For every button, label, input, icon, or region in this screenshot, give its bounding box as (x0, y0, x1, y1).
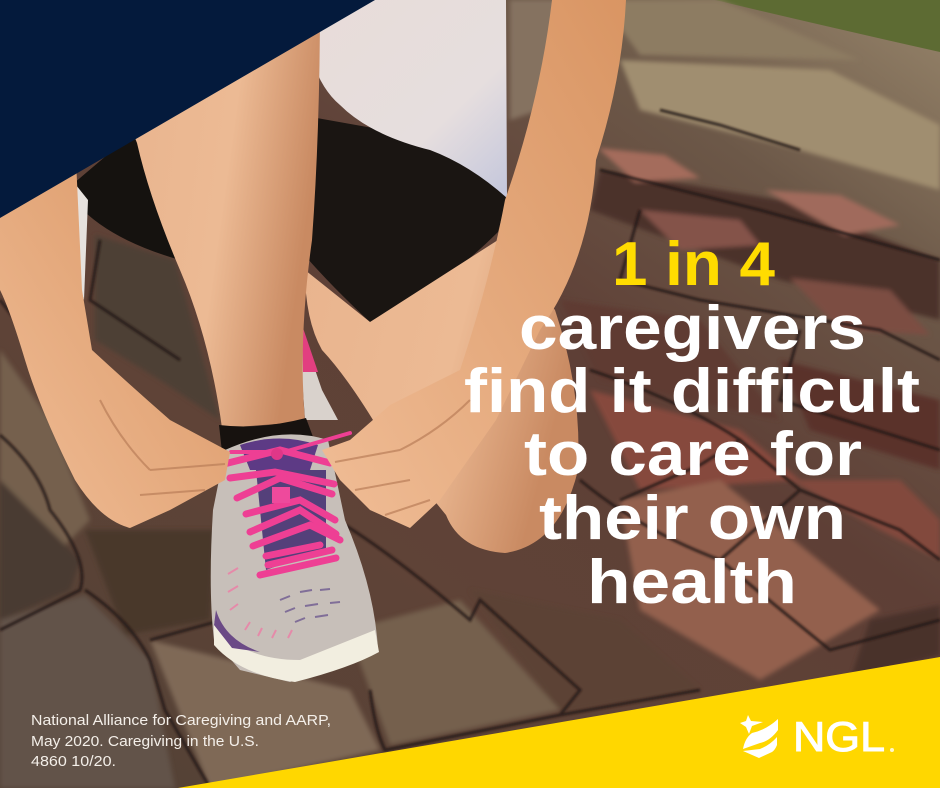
photo: shoe mesh dashes (280, 589, 340, 622)
photo: right arm and hand (322, 0, 626, 528)
yellow corner band (178, 657, 940, 788)
photo: sock (219, 418, 316, 452)
photo: white shirt (300, 0, 507, 198)
photo: rear thigh and knee (305, 240, 579, 553)
wordmark: NGL: NGL (793, 713, 885, 760)
source footnote (31, 713, 331, 770)
photo: left arm and hand (0, 160, 230, 528)
icon: shield with star (740, 715, 778, 758)
NGL logo (740, 713, 894, 760)
photo: far (back) lower leg and shoe (298, 320, 338, 420)
source footnote: 4860 10/20. (31, 754, 116, 770)
navy corner triangle (0, 0, 375, 218)
photo: shoe (211, 433, 379, 682)
headline line: to care for: to care for (524, 420, 862, 489)
registered mark (890, 748, 894, 752)
headline line: caregivers: caregivers (519, 294, 866, 363)
headline line: their own: their own (539, 484, 846, 553)
headline line: health: health (587, 548, 797, 617)
photo: pink laces (224, 433, 350, 575)
photo: front leg (120, 0, 320, 428)
headline line: find it difficult: find it difficult (464, 357, 920, 426)
headline (464, 230, 920, 617)
source footnote: May 2020. Caregiving in the U.S. (31, 734, 259, 750)
photo: black shorts (60, 110, 507, 322)
source footnote: National Alliance for Caregiving and AARP, (31, 713, 331, 729)
statistic: 1 in 4: 1 in 4 (612, 230, 776, 299)
